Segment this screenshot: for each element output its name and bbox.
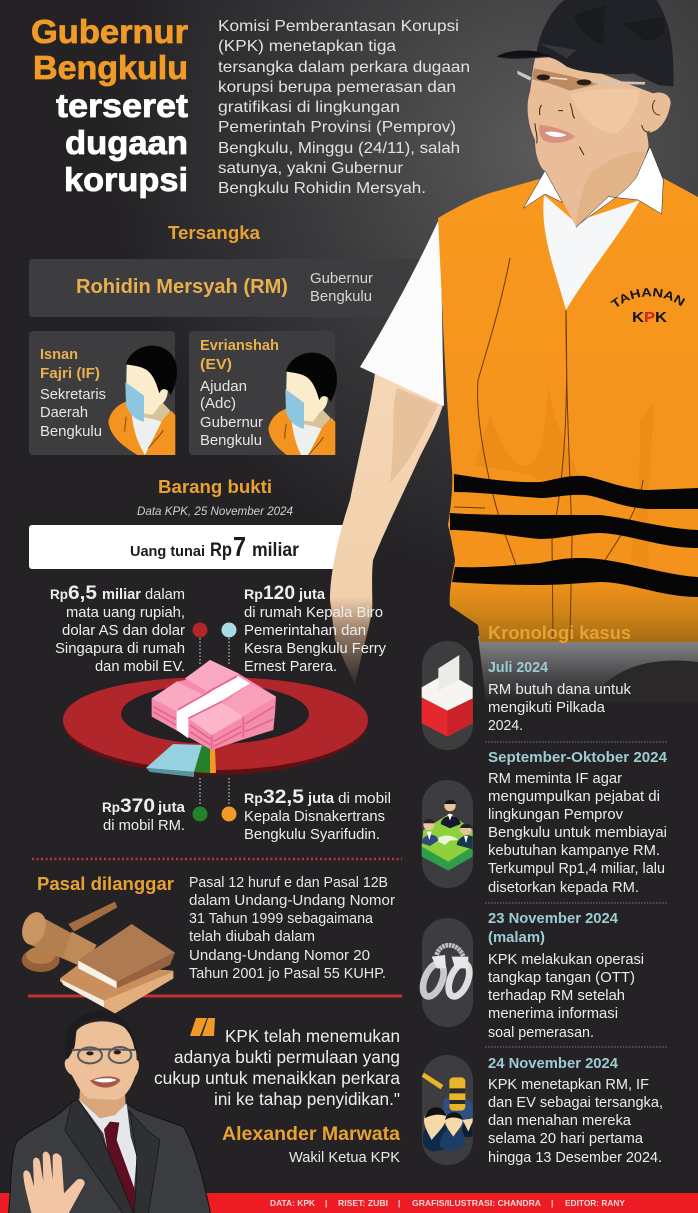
quote text: adanya bukti permulaan yang bbox=[174, 1047, 400, 1067]
left bundle bbox=[152, 682, 203, 711]
total cash banner: miliar bbox=[252, 540, 300, 561]
white paper bands bbox=[177, 676, 250, 738]
panel: Isnan Fajri bbox=[29, 331, 177, 457]
label: Rp370 juta: di mobil RM. bbox=[103, 818, 185, 834]
timeline entry: Juli 2024: mengikuti Pilkada bbox=[488, 700, 606, 716]
footer credits bar: DATA: KPK bbox=[270, 1198, 316, 1208]
slice: rumah Kepala Biro bbox=[146, 744, 202, 777]
quote text: ini ke tahap penyidikan." bbox=[214, 1089, 400, 1109]
timeline pill with handcuffs icon bbox=[419, 918, 474, 1027]
quote text: cukup untuk menaikkan perkara bbox=[154, 1068, 400, 1088]
quote attribution: name: Alexander Marwata bbox=[222, 1124, 400, 1145]
title: korupsi bbox=[64, 161, 188, 198]
label: Rp6,5 miliar: dan mobil EV. bbox=[95, 659, 185, 675]
slice: mobil Kepala Disnakertrans bbox=[210, 749, 216, 773]
timeline entry: 24 November 2024: selama 20 hari pertama bbox=[488, 1131, 644, 1147]
vest seams bbox=[454, 258, 643, 640]
timeline entry: 23 November 2024: tangkap tangan (OTT) bbox=[488, 970, 635, 986]
eyes bbox=[537, 74, 591, 85]
quote text: KPK telah menemukan bbox=[225, 1026, 400, 1046]
timeline entry: 24 November 2024: 24 November 2024 bbox=[488, 1056, 618, 1072]
label: Rp120 juta: Pemerintahan dan bbox=[244, 623, 366, 639]
timeline entry: 23 November 2024: (malam) bbox=[488, 930, 545, 946]
label: Rp6,5 miliar: miliar bbox=[102, 587, 141, 603]
timeline pill with gavel and suspects icon bbox=[422, 1055, 473, 1165]
timeline entry: 24 November 2024: dan EV sebagai tersangka, bbox=[488, 1095, 663, 1111]
label: Rp32,5 juta: juta bbox=[307, 791, 335, 807]
panel: Isnan Fajri: Bengkulu bbox=[40, 424, 102, 440]
timeline entry: 24 November 2024: KPK menetapkan RM, IF bbox=[488, 1077, 649, 1093]
tie bbox=[104, 1122, 135, 1213]
label: Rp6,5 miliar: dalam bbox=[145, 587, 185, 603]
label: Rp370 juta: juta bbox=[157, 800, 186, 816]
heading: Barang bukti: Barang bukti bbox=[158, 477, 272, 497]
arm bbox=[330, 373, 443, 685]
TAHANAN KPK vest print bbox=[610, 288, 686, 326]
label: Rp120 juta: di rumah Kepala Biro bbox=[244, 605, 383, 621]
section: Kronologi kasus heading: Kronologi kasus bbox=[488, 623, 631, 643]
timeline entry: Juli 2024 bbox=[488, 660, 632, 734]
timeline entry: 24 November 2024 bbox=[488, 1056, 663, 1166]
timeline entry: September-Oktober 2024: disetorkan kepada RM. bbox=[488, 880, 639, 896]
panel: Evrianshah: Bengkulu bbox=[200, 433, 262, 449]
suit bbox=[8, 1102, 211, 1213]
footer credits bar: RISET: ZUBI bbox=[338, 1198, 388, 1208]
title: Gubernur bbox=[31, 13, 188, 50]
intro paragraph: satunya, yakni Gubernur bbox=[218, 160, 404, 177]
label: Rp6,5 miliar: Singapura di rumah bbox=[55, 641, 185, 657]
footer credits bar: | bbox=[551, 1198, 553, 1208]
timeline entry: 23 November 2024: KPK melakukan operasi bbox=[488, 952, 644, 968]
timeline entry: September-Oktober 2024: mengumpulkan pejabat di bbox=[488, 789, 660, 805]
panel: Evrianshah: (EV) bbox=[200, 357, 232, 373]
text: articles violated: 31 Tahun 1999 sebagaimana bbox=[189, 911, 374, 927]
slice: mobil RM bbox=[194, 745, 210, 773]
vest bbox=[438, 178, 698, 642]
neck bbox=[79, 1088, 126, 1119]
mouth bbox=[539, 125, 575, 143]
intro paragraph: gratifikasi di lingkungan bbox=[218, 99, 400, 116]
total cash banner: 7 bbox=[233, 531, 246, 562]
head and collar bbox=[497, 0, 674, 227]
timeline entry: September-Oktober 2024: lingkungan Pemprov bbox=[488, 807, 624, 823]
donut ring bbox=[63, 677, 368, 775]
label: Rp32,5 juta: Kepala Disnakertrans bbox=[244, 809, 385, 825]
raised hand bbox=[23, 1152, 85, 1213]
label: Rp120 juta: Ernest Parera. bbox=[244, 659, 337, 675]
text: articles violated: Tahun 2001 jo Pasal 55 KUHP. bbox=[189, 966, 386, 982]
timeline entry: September-Oktober 2024: Terkumpul Rp1,4 miliar, lalu bbox=[488, 861, 665, 877]
label: Rp6,5 miliar: mata uang rupiah, bbox=[66, 605, 185, 621]
bundle edge strips bbox=[153, 677, 274, 749]
title: dugaan bbox=[65, 124, 188, 161]
mouth bbox=[90, 1076, 121, 1088]
panel: Rohidin Mersyah: Bengkulu bbox=[310, 289, 372, 305]
legend dot: Rp6,5 miliar bbox=[192, 622, 208, 638]
right bundle bbox=[222, 683, 276, 717]
intro paragraph: Bengkulu, Minggu (24/11), salah bbox=[218, 140, 460, 157]
title: Bengkulu bbox=[33, 49, 188, 86]
glasses bbox=[72, 1047, 135, 1063]
timeline entry: 23 November 2024: terhadap RM setelah bbox=[488, 988, 625, 1004]
illustration: suspect in orange KPK vest bbox=[330, 0, 698, 698]
shirt front bbox=[543, 195, 640, 310]
gavel head bbox=[18, 909, 97, 968]
label: Rp120 juta: juta bbox=[298, 587, 326, 603]
intro paragraph: Pemerintah Provinsi (Pemprov) bbox=[218, 119, 456, 136]
timeline entry: 23 November 2024 bbox=[488, 911, 644, 1041]
footer credits bar: | bbox=[325, 1198, 327, 1208]
cap bbox=[497, 0, 674, 87]
legend dot: Rp32,5 juta bbox=[222, 806, 236, 822]
TAHANAN KPK vest print: KPK bbox=[632, 309, 667, 326]
label: Rp120 juta bbox=[244, 583, 387, 675]
trousers bbox=[478, 636, 698, 702]
brow shadow bbox=[532, 68, 598, 91]
sleeve bbox=[360, 217, 444, 406]
gavel handle bbox=[68, 902, 117, 932]
upper book bbox=[78, 924, 175, 988]
heading: Pasal dilanggar: Pasal dilanggar bbox=[37, 874, 174, 894]
timeline entry: September-Oktober 2024: RM meminta IF agar bbox=[488, 771, 622, 787]
label: Rp6,5 miliar: 6,5 bbox=[68, 583, 97, 604]
legend dot: Rp370 juta bbox=[192, 806, 208, 822]
legend dot: Rp120 juta bbox=[222, 622, 236, 638]
label: Rp32,5 juta: Bengkulu Syarifudin. bbox=[244, 827, 380, 843]
panel: Isnan Fajri: Sekretaris bbox=[40, 387, 106, 403]
panel: Evrianshah: Gubernur bbox=[200, 415, 263, 431]
neck shade bbox=[576, 151, 645, 227]
timeline entry: September-Oktober 2024: September-Oktober 2024 bbox=[488, 750, 667, 766]
label: Rp370 juta bbox=[102, 796, 186, 834]
panel: Rohidin Mersyah: Rohidin Mersyah (RM) bbox=[76, 276, 288, 298]
timeline entry: September-Oktober 2024 bbox=[488, 750, 667, 896]
timeline entry: Juli 2024: 2024. bbox=[488, 718, 523, 734]
footer credits bar bbox=[0, 1193, 698, 1213]
title: terseret bbox=[56, 87, 188, 124]
timeline entry: September-Oktober 2024: Bengkulu untuk membiayai bbox=[488, 825, 667, 841]
collar bbox=[523, 147, 663, 227]
neck and face bbox=[528, 57, 671, 227]
timeline entry: 24 November 2024: hingga 13 Desember 2024. bbox=[488, 1150, 662, 1166]
timeline entry: Juli 2024: RM butuh dana untuk bbox=[488, 682, 632, 698]
label: Rp370 juta: Rp bbox=[102, 799, 120, 815]
timeline entry: 23 November 2024: 23 November 2024 bbox=[488, 911, 618, 927]
label: Rp32,5 juta bbox=[244, 787, 391, 843]
label: Rp120 juta: Rp bbox=[244, 586, 263, 602]
illustration: Alexander Marwata bbox=[8, 1011, 211, 1213]
label: Rp6,5 miliar: Rp bbox=[50, 586, 68, 602]
front bundle bbox=[188, 702, 243, 735]
title bbox=[31, 13, 188, 198]
panel: Evrianshah bbox=[189, 331, 337, 464]
intro paragraph bbox=[218, 18, 470, 197]
text: articles violated: Pasal 12 huruf e dan Pasal 12B bbox=[189, 875, 388, 891]
panel: Rohidin Mersyah bbox=[29, 259, 439, 317]
ear line bbox=[642, 100, 660, 132]
label: Rp6,5 miliar bbox=[50, 583, 185, 675]
face bbox=[65, 1021, 139, 1100]
intro paragraph: tersangka dalam perkara dugaan bbox=[218, 59, 470, 76]
vest shading bbox=[475, 385, 654, 570]
label: Rp370 juta: 370 bbox=[120, 796, 155, 817]
panel: Isnan Fajri: Daerah bbox=[40, 405, 88, 421]
label: Rp32,5 juta: 32,5 bbox=[263, 787, 304, 808]
total cash banner: Rp bbox=[210, 540, 232, 561]
intro paragraph: korupsi berupa pemerasan dan bbox=[218, 79, 456, 96]
eyes bbox=[86, 1050, 121, 1055]
timeline entry: September-Oktober 2024: kebutuhan kampanye RM. bbox=[488, 843, 660, 859]
silhouette bbox=[152, 660, 276, 750]
evidence donut chart with cash bbox=[63, 660, 368, 777]
glasses bbox=[517, 71, 645, 83]
footer credits bar: | bbox=[398, 1198, 400, 1208]
panel: Isnan Fajri: Fajri (IF) bbox=[40, 366, 100, 382]
text: articles violated: dalam Undang-Undang Nomor bbox=[189, 893, 395, 909]
sounding block bbox=[22, 947, 60, 972]
data source note: Data KPK, 25 November 2024 bbox=[137, 506, 293, 518]
text: articles violated: telah diubah dalam bbox=[189, 929, 315, 945]
total cash banner: Uang tunai bbox=[130, 543, 205, 560]
nose and wrinkles bbox=[535, 103, 584, 155]
TAHANAN KPK vest print: TAHANAN bbox=[610, 288, 686, 307]
footer credits bar: EDITOR: RANY bbox=[565, 1198, 625, 1208]
panel: Isnan Fajri: Isnan bbox=[40, 347, 78, 363]
label: Rp32,5 juta: di mobil bbox=[338, 791, 391, 807]
panel: Evrianshah: Evrianshah bbox=[200, 338, 279, 354]
back bundle bbox=[185, 660, 238, 692]
timeline entry: Juli 2024: Juli 2024 bbox=[488, 660, 548, 676]
total cash banner bbox=[29, 525, 359, 569]
panel: Rohidin Mersyah: Gubernur bbox=[310, 271, 373, 287]
text: articles violated: Undang-Undang Nomor 20 bbox=[189, 948, 370, 964]
label: Rp32,5 juta: Rp bbox=[244, 790, 263, 806]
lapels bbox=[65, 1100, 160, 1213]
face light patch bbox=[570, 89, 640, 133]
intro paragraph: (KPK) menetapkan tiga bbox=[218, 38, 396, 55]
intro paragraph: Bengkulu Rohidin Mersyah. bbox=[218, 180, 426, 197]
pile of rupiah banknotes bbox=[152, 660, 276, 750]
quote attribution: role: Wakil Ketua KPK bbox=[289, 1150, 400, 1166]
shirt bbox=[78, 1098, 137, 1189]
icon: gavel and law books bbox=[18, 902, 175, 1013]
timeline pill with ballot box icon bbox=[422, 641, 473, 750]
hair bbox=[65, 1011, 137, 1058]
label: Rp6,5 miliar: dolar AS dan dolar bbox=[62, 623, 185, 639]
icon: quotation mark bbox=[190, 1018, 215, 1036]
timeline entry: 23 November 2024: menerima informasi bbox=[488, 1006, 618, 1022]
vest reflective stripes bbox=[450, 474, 698, 597]
lower book bbox=[60, 963, 173, 1013]
label: Rp120 juta: Kesra Bengkulu Ferry bbox=[244, 641, 387, 657]
dotted leader lines bbox=[200, 638, 229, 806]
heading: Tersangka: Tersangka bbox=[168, 223, 261, 243]
label: Rp120 juta: 120 bbox=[263, 583, 295, 604]
timeline pill with meeting icon bbox=[422, 780, 473, 888]
timeline entry: 24 November 2024: dan menahan mereka bbox=[488, 1113, 632, 1129]
panel: Evrianshah: (Adc) bbox=[200, 396, 236, 412]
panel: Evrianshah: Ajudan bbox=[200, 379, 247, 395]
intro paragraph: Komisi Pemberantasan Korupsi bbox=[218, 18, 459, 35]
text: articles violated bbox=[189, 875, 395, 982]
quote text bbox=[154, 1026, 400, 1109]
footer credits bar: GRAFIS/ILUSTRASI: CHANDRA bbox=[412, 1198, 541, 1208]
timeline entry: 23 November 2024: soal pemerasan. bbox=[488, 1025, 594, 1041]
